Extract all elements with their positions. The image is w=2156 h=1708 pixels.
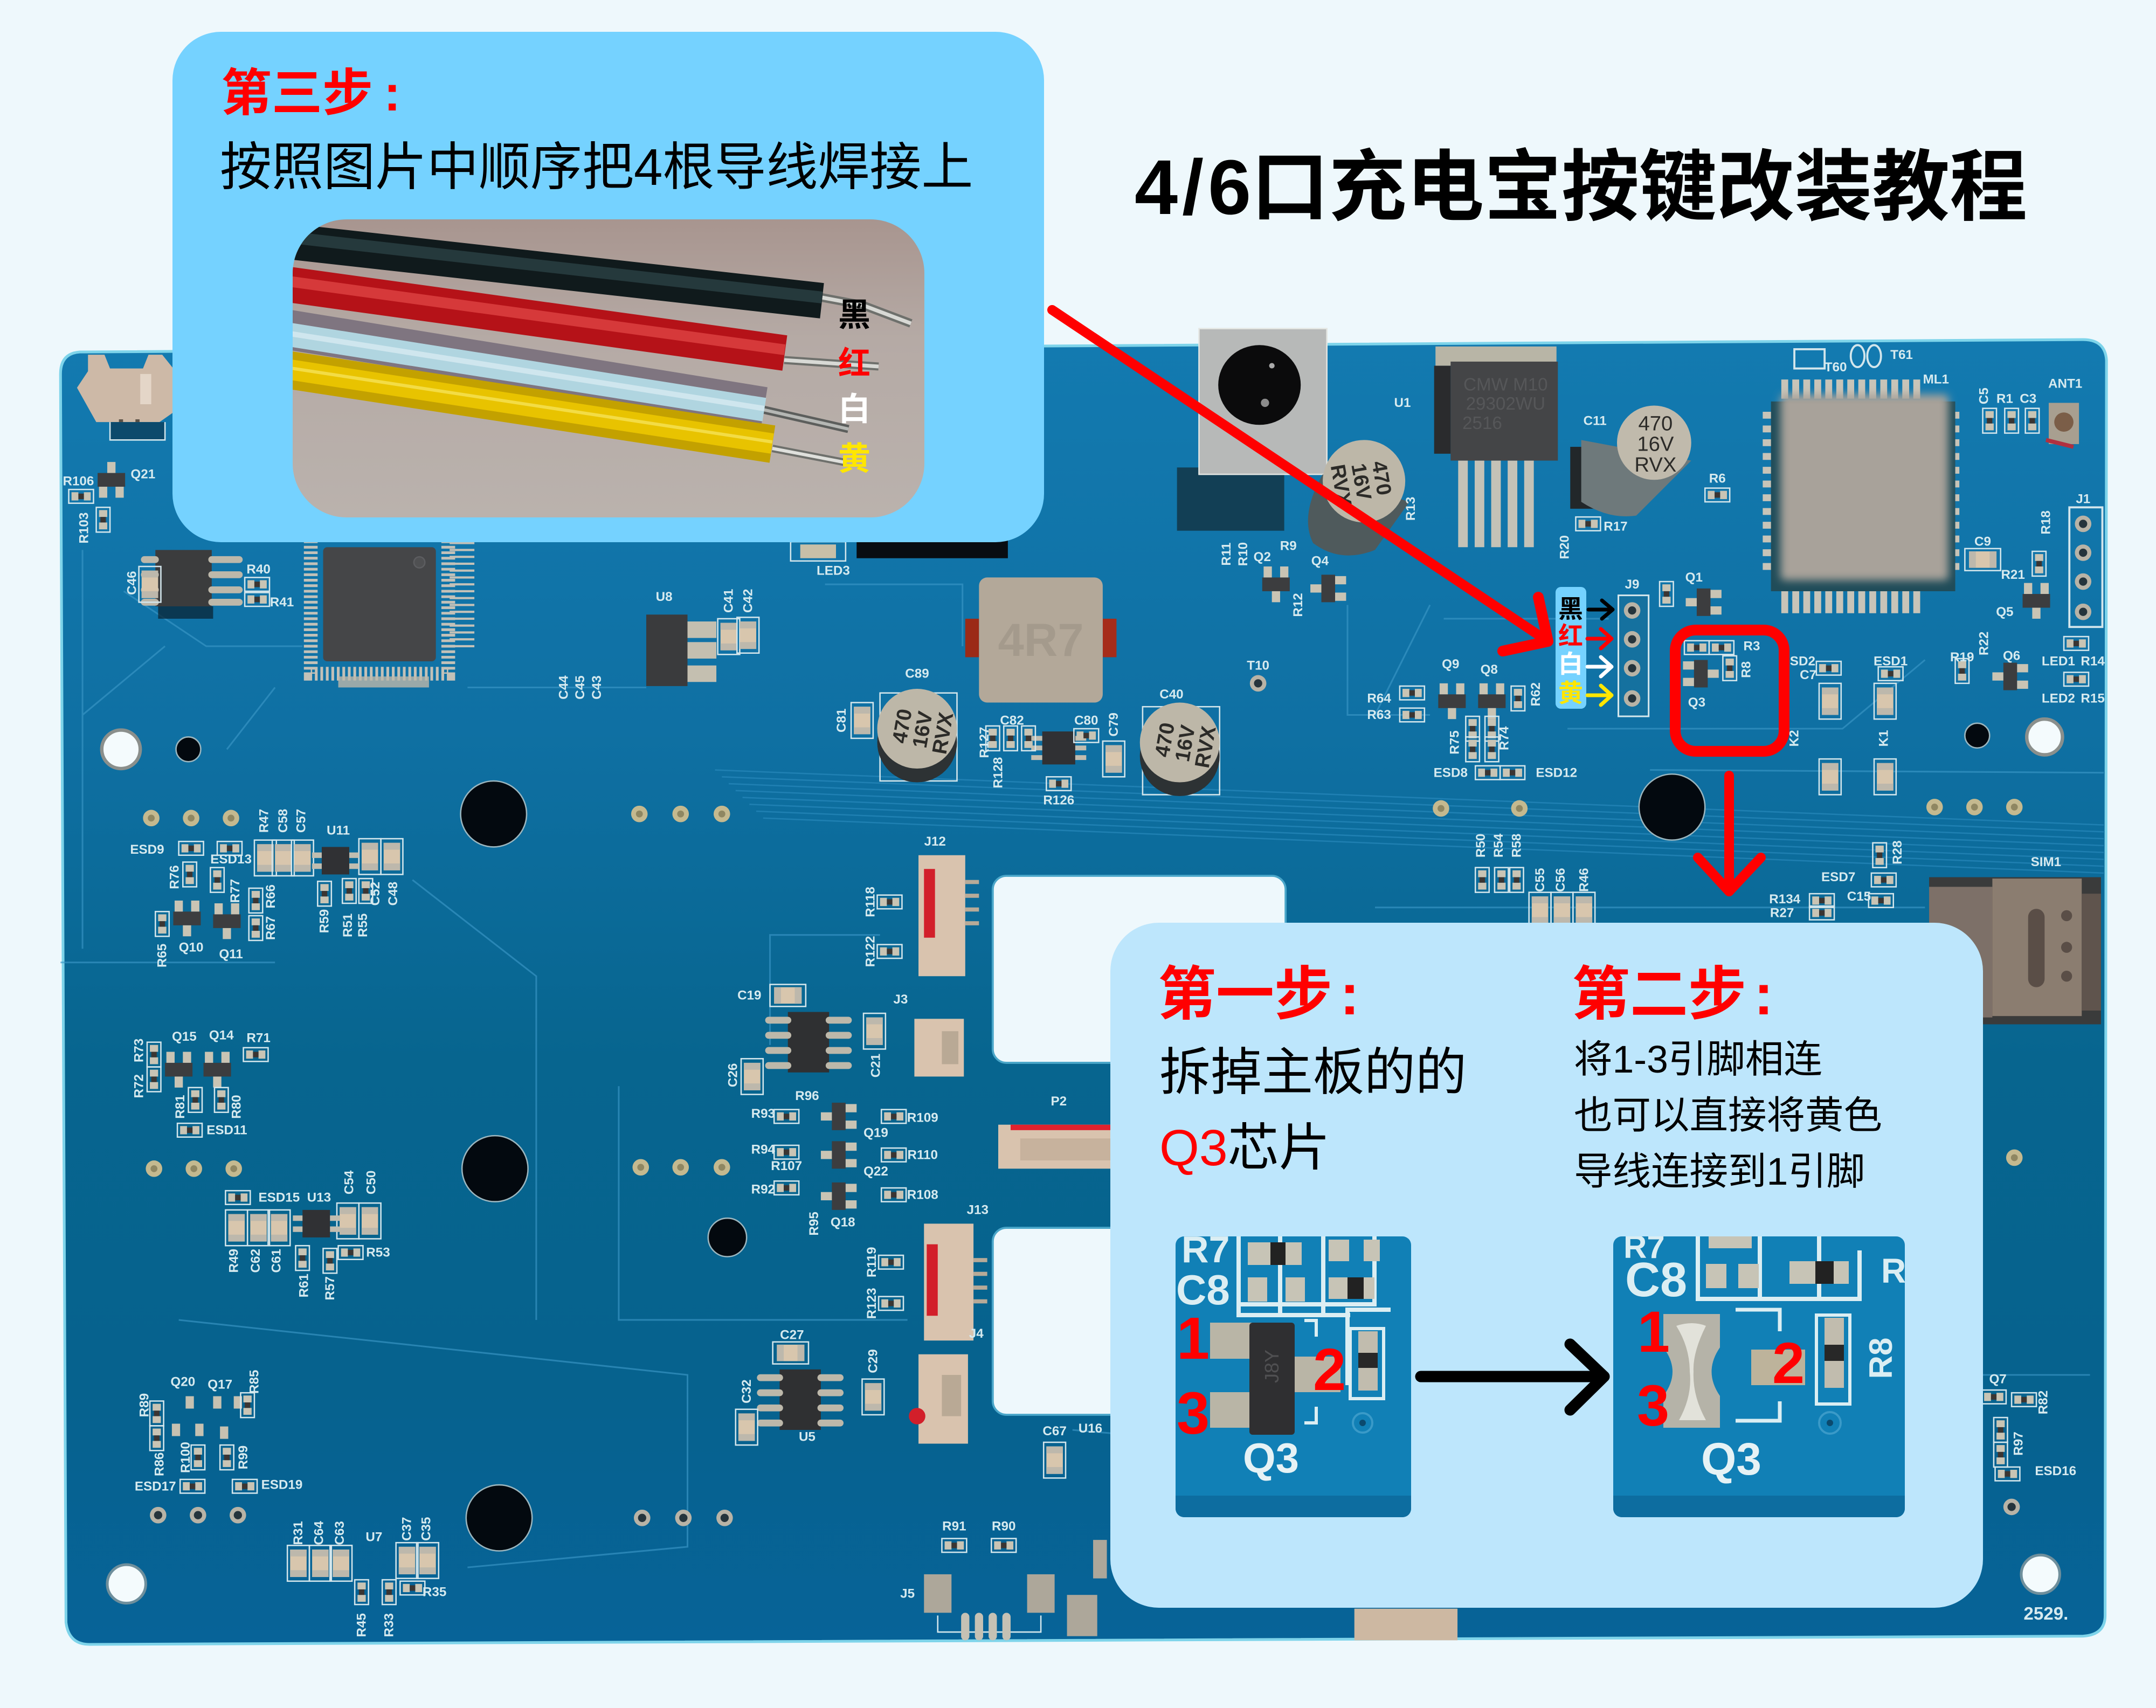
panel background (172, 32, 1044, 542)
silkscreen labels: K1 (1877, 730, 1891, 746)
silkscreen labels: C45 (573, 675, 588, 700)
silkscreen labels: R51 (341, 914, 355, 937)
silkscreen labels: C89 (905, 667, 929, 681)
silkscreen labels: R128 (991, 757, 1006, 789)
silkscreen labels: C52 (368, 882, 383, 905)
step 2 text: 将1-3引脚相连 (1574, 1038, 1822, 1081)
silkscreen labels: R85 (247, 1370, 262, 1394)
silkscreen labels: U13 (307, 1191, 331, 1205)
silkscreen labels: R64 (1367, 692, 1391, 706)
silkscreen labels: C35 (419, 1517, 433, 1541)
inductor (965, 577, 1116, 703)
inductor: 4R7 (998, 614, 1084, 666)
silkscreen labels: R35 (423, 1585, 446, 1600)
chip: U5 (761, 1370, 840, 1430)
capacitor: C11 tilted: 470 (1638, 412, 1673, 435)
silkscreen labels: R27 (1770, 906, 1794, 921)
black screw holes (176, 723, 1989, 1551)
silkscreen labels: R103 (77, 513, 91, 544)
silkscreen labels: C21 (869, 1054, 883, 1077)
silkscreen labels: R3 (1743, 639, 1760, 654)
panel: step 3 (172, 32, 1044, 542)
wire colour labels: 白 (838, 391, 870, 427)
silkscreen labels: R123 (865, 1288, 879, 1319)
silkscreen labels: R72 (132, 1074, 146, 1098)
step 2 text (1574, 1038, 1882, 1193)
capacitor: C4 tilted: 470 (1367, 459, 1396, 497)
silkscreen labels: R95 (807, 1212, 821, 1236)
silkscreen labels: P2 (1051, 1094, 1067, 1109)
silkscreen labels: C46 (125, 571, 140, 595)
silkscreen labels: Q5 (1996, 605, 2014, 619)
silkscreen labels: R66 (264, 884, 278, 908)
wireless module ML1 (1763, 379, 1959, 613)
silkscreen labels: R19 (1950, 650, 1974, 665)
silkscreen labels: R17 (1604, 520, 1628, 534)
photo: Q3 after bridging: R (1881, 1251, 1906, 1290)
silkscreen labels: C54 (342, 1170, 357, 1194)
silkscreen labels: C43 (590, 675, 604, 700)
silkscreen labels: C61 (269, 1249, 284, 1273)
silkscreen labels: U7 (365, 1530, 382, 1545)
silkscreen labels: R122 (863, 936, 877, 967)
mounting holes (102, 719, 2063, 1603)
components: left block (147, 839, 439, 1605)
silkscreen labels: R46 (1577, 868, 1591, 892)
silkscreen labels: C5 (1977, 388, 1992, 404)
silkscreen labels: Q17 (208, 1378, 232, 1392)
silkscreen labels: ESD1 (1874, 654, 1908, 669)
power regulator U1: 2516 (1462, 413, 1502, 433)
panel background (1110, 923, 1983, 1608)
silkscreen labels: Q14 (209, 1028, 234, 1043)
through-hole pads (143, 675, 2023, 1526)
silkscreen labels: ML1 (1923, 372, 1949, 387)
silkscreen labels: C50 (364, 1171, 378, 1194)
silkscreen labels: Q8 (1481, 662, 1498, 677)
silkscreen labels: R94 (751, 1142, 776, 1157)
step 2 text: 也可以直接将黄色 (1574, 1094, 1882, 1137)
wire colour labels (838, 297, 870, 477)
capacitor: C89 (877, 689, 958, 783)
silkscreen labels: Q9 (1442, 657, 1459, 672)
chip: large QFP (311, 535, 474, 688)
silkscreen labels: R67 (264, 916, 278, 940)
photo: Q3 after bridging: R7 (1623, 1229, 1665, 1265)
silkscreen labels: C58 (276, 809, 291, 833)
silkscreen labels: R12 (1291, 593, 1305, 617)
silkscreen labels: C42 (741, 589, 755, 613)
silkscreen labels: R126 (1043, 793, 1074, 807)
pin numbers: after: 2 (1772, 1330, 1805, 1395)
silkscreen labels: R10 (1236, 542, 1250, 566)
heading: step 3: 第三步: (221, 65, 400, 121)
silkscreen labels: ESD12 (1536, 765, 1577, 780)
silkscreen labels: Q10 (179, 940, 203, 955)
silkscreen labels: C9 (1974, 535, 1991, 549)
silkscreen labels: T61 (1890, 348, 1913, 362)
silkscreen labels: Q18 (831, 1215, 855, 1229)
silkscreen labels: C44 (557, 675, 571, 700)
wire: white (270, 327, 848, 429)
silkscreen labels: R99 (236, 1446, 251, 1469)
silkscreen labels: R93 (751, 1107, 775, 1121)
test pads T60 T61 (1794, 345, 1881, 369)
silkscreen labels: R18 (2039, 510, 2054, 535)
silkscreen labels: R106 (63, 474, 94, 489)
silkscreen labels (63, 348, 2105, 1637)
silkscreen labels: Q22 (863, 1164, 888, 1179)
silkscreen labels: C40 (1159, 687, 1184, 702)
silkscreen labels: LED1 (2042, 654, 2075, 669)
silkscreen labels: R63 (1367, 708, 1391, 722)
silkscreen labels: J4 (969, 1326, 984, 1341)
title: 4/6口充电宝按键改装教程 (1135, 144, 2027, 231)
silkscreen labels: C79 (1107, 713, 1121, 737)
silkscreen labels: R97 (2012, 1432, 2026, 1456)
silkscreen labels: Q1 (1685, 570, 1703, 585)
silkscreen labels: C26 (725, 1063, 740, 1087)
chip: U9 (139, 550, 270, 619)
photo: Q3 before removal: J8Y (1261, 1350, 1283, 1383)
silkscreen labels: R40 (246, 562, 271, 577)
silkscreen labels: ESD13 (210, 852, 252, 867)
silkscreen labels: T10 (1247, 658, 1269, 673)
capacitor: C11 tilted: 16V (1637, 433, 1674, 456)
photo: Q3 after bridging (1613, 1229, 1906, 1517)
silkscreen labels: C11 (1584, 413, 1607, 428)
SIM card slot (1929, 877, 2101, 1024)
silkscreen labels: R62 (1529, 682, 1543, 706)
silkscreen labels: R109 (907, 1111, 938, 1125)
silkscreen labels: R9 (1280, 538, 1297, 553)
wire: red (270, 279, 879, 367)
silkscreen labels: R89 (137, 1393, 152, 1417)
silkscreen labels: C55 (1533, 868, 1547, 892)
silkscreen labels: ESD8 (1434, 765, 1468, 780)
silkscreen labels: C3 (2020, 391, 2036, 406)
silkscreen labels: R8 (1739, 661, 1753, 678)
connectors J12 J3 P2 J13 J4 (909, 855, 1115, 1444)
silkscreen labels: R74 (1497, 726, 1511, 750)
silkscreen labels: R73 (132, 1039, 146, 1062)
key arrows (1587, 600, 1613, 705)
silkscreen labels: R21 (2001, 568, 2025, 582)
silkscreen labels: R55 (356, 914, 370, 937)
silkscreen labels: R90 (992, 1519, 1015, 1533)
step 1 text: Q3 chip: Q3芯片 (1159, 1119, 1330, 1177)
pin numbers: before (1178, 1318, 1344, 1434)
silkscreen labels: ANT1 (2048, 376, 2082, 391)
silkscreen labels: R134 (1769, 892, 1801, 907)
silkscreen labels: Q21 (130, 467, 155, 482)
silkscreen labels: R86 (153, 1453, 167, 1476)
silkscreen labels: R14 (2081, 654, 2105, 669)
key labels (1558, 595, 1583, 707)
silkscreen labels: U8 (656, 590, 673, 604)
silkscreen labels: C32 (740, 1379, 754, 1403)
photo: Q3 before removal (1176, 1228, 1411, 1517)
capacitor: C40 (1140, 703, 1221, 796)
photo: four wires (270, 219, 924, 517)
silkscreen labels: J13 (967, 1203, 989, 1218)
power regulator U1 (1434, 347, 1558, 547)
silkscreen labels: U16 (1079, 1421, 1102, 1436)
red box around Q3 (1675, 630, 1784, 751)
heading: step 2: 第二步: (1572, 962, 1773, 1027)
silkscreen labels: R11 (1219, 543, 1234, 566)
silkscreen labels: ESD11 (206, 1123, 247, 1138)
silkscreen labels: C67 (1042, 1424, 1067, 1439)
silkscreen labels: R54 (1491, 833, 1506, 858)
silkscreen labels: R20 (1558, 535, 1572, 559)
chip: U3 (769, 1012, 848, 1073)
key labels: 黄 (1558, 679, 1583, 707)
silkscreen labels: LED2 (2042, 692, 2075, 706)
silkscreen labels: R1 (1996, 391, 2013, 406)
silkscreen labels: R33 (382, 1613, 397, 1637)
silkscreen labels: R110 (907, 1147, 938, 1162)
silkscreen labels: Q11 (219, 947, 243, 962)
photo: Q3 after bridging: C8 (1625, 1253, 1687, 1307)
capacitor: C4 tilted (1308, 440, 1409, 556)
board outline (60, 340, 2106, 1644)
wire colour key (1556, 587, 1613, 709)
silkscreen labels: C64 (312, 1521, 326, 1545)
antenna connector (1983, 403, 2079, 447)
silkscreen labels: LED3 (817, 563, 850, 578)
silkscreen labels: C37 (400, 1517, 414, 1541)
silkscreen labels: C7 (1800, 668, 1816, 682)
step 2 text: 导线连接到1引脚 (1574, 1150, 1865, 1193)
wire: yellow (270, 365, 845, 462)
silkscreen labels: R15 (2081, 692, 2105, 706)
silkscreen labels: R53 (366, 1246, 390, 1260)
wire colour labels: 黄 (838, 441, 870, 477)
silkscreen labels: R77 (228, 879, 243, 903)
silkscreen labels: R80 (229, 1095, 244, 1119)
capacitor: C11 tilted (1570, 406, 1691, 516)
silkscreen labels: R31 (291, 1521, 306, 1545)
silkscreen labels: U1 (1394, 396, 1411, 410)
silkscreen labels: R28 (1890, 840, 1905, 865)
pin numbers: after (1639, 1312, 1802, 1426)
silkscreen labels: R108 (907, 1187, 938, 1202)
silkscreen labels: U5 (799, 1429, 816, 1444)
silkscreen labels: Q3 (1688, 695, 1705, 710)
pin numbers: before: 2 (1313, 1337, 1346, 1403)
silkscreen labels: C41 (722, 589, 736, 613)
silkscreen labels: R82 (2036, 1391, 2050, 1414)
silkscreen labels: R58 (1509, 834, 1524, 858)
wire colour labels: 黑 (838, 297, 870, 333)
capacitor: C4 tilted: 16V (1346, 462, 1376, 502)
silkscreen labels: Q6 (2003, 648, 2020, 663)
connector J5 (924, 1540, 1107, 1636)
silkscreen labels: U11 (327, 823, 350, 838)
instruction text: 按照图片中顺序把4根导线焊接上 (220, 139, 973, 196)
silkscreen labels: Q7 (1989, 1372, 2007, 1386)
silkscreen labels: C63 (333, 1521, 347, 1545)
silkscreen labels: C57 (294, 809, 308, 833)
silkscreen labels: ESD16 (2035, 1464, 2076, 1478)
pin numbers: after: 3 (1637, 1373, 1669, 1438)
silkscreen labels: J12 (924, 834, 946, 849)
panel: steps 1 and 2 (1110, 923, 1983, 1608)
chip: Q21 (69, 462, 125, 532)
circuit board photo (60, 329, 2106, 1644)
silkscreen labels: C56 (1553, 868, 1568, 892)
silkscreen labels: J3 (893, 992, 908, 1007)
silkscreen labels: SD2 (1790, 654, 1815, 669)
key background (1556, 587, 1586, 709)
silkscreen labels: J9 (1625, 577, 1640, 592)
capacitor: C11 tilted: RVX (1634, 453, 1676, 476)
silkscreen labels: 2529. (2023, 1604, 2068, 1624)
silkscreen labels: ESD9 (130, 842, 164, 857)
silkscreen labels: R75 (1448, 730, 1462, 755)
key labels: 黑 (1558, 595, 1583, 623)
silkscreen labels: Q4 (1311, 554, 1329, 568)
long red arrow to J9 (1052, 310, 1548, 651)
header J1 (2069, 507, 2102, 627)
silkscreen labels: R127 (977, 727, 992, 758)
connector: bottom edge (1355, 1609, 1457, 1640)
silkscreen labels: R81 (173, 1095, 188, 1119)
capacitor: C4 tilted: RVX (1326, 462, 1356, 508)
header J9 (1619, 596, 1649, 716)
silkscreen labels: R41 (270, 595, 294, 610)
heading: step 1: 第一步: (1158, 962, 1359, 1027)
silkscreen labels: R76 (168, 865, 182, 889)
silkscreen labels: J1 (2076, 492, 2090, 507)
silkscreen labels: R96 (795, 1089, 819, 1103)
silkscreen labels: R57 (323, 1276, 337, 1301)
silkscreen labels: R119 (865, 1247, 879, 1277)
silkscreen labels: R107 (771, 1159, 802, 1173)
silkscreen labels: C82 (1000, 713, 1024, 728)
connector: top-left (77, 355, 173, 440)
silkscreen labels: C81 (834, 709, 849, 732)
silkscreen labels: C80 (1074, 713, 1098, 728)
wire: black (270, 235, 911, 323)
silkscreen labels: R47 (257, 809, 271, 833)
silkscreen labels: R92 (751, 1182, 775, 1197)
regulator U8 (646, 614, 873, 738)
photo: Q3 after bridging: R8 (1863, 1338, 1899, 1379)
silkscreen labels: ESD7 (1821, 870, 1855, 884)
transistors: middle (736, 895, 1066, 1552)
silkscreen labels: ESD17 (135, 1479, 176, 1493)
silkscreen labels: K2 (1787, 730, 1802, 746)
silkscreen labels: R65 (155, 944, 170, 967)
silkscreen labels: Q15 (172, 1029, 197, 1044)
key labels: 红 (1558, 622, 1583, 650)
silkscreen labels: C29 (866, 1349, 881, 1373)
silkscreen labels: T60 (1825, 360, 1847, 375)
power regulator U1: 29302WU (1466, 394, 1545, 414)
silkscreen labels: ESD15 (258, 1191, 300, 1205)
silkscreen labels: SIM1 (2031, 855, 2061, 869)
silkscreen labels: R91 (942, 1519, 966, 1533)
silkscreen labels: Q19 (863, 1126, 888, 1140)
silkscreen labels: J5 (900, 1586, 915, 1601)
chip: U18 (986, 726, 1125, 791)
red arrow down to panel (1698, 776, 1761, 891)
silkscreen labels: Q2 (1254, 550, 1271, 564)
silkscreen labels: R59 (317, 909, 332, 933)
pin numbers: before: 1 (1177, 1305, 1210, 1372)
silkscreen labels: Q20 (170, 1374, 195, 1389)
DC jack (1177, 329, 1327, 531)
silkscreen labels: R22 (1977, 632, 1992, 655)
silkscreen labels: R61 (296, 1274, 311, 1297)
board cutout windows (993, 876, 1286, 1415)
key labels: 白 (1558, 650, 1583, 678)
silkscreen labels: C27 (780, 1328, 804, 1343)
silkscreen labels: C48 (386, 882, 400, 905)
pin numbers: after: 1 (1637, 1299, 1670, 1364)
silkscreen labels: C19 (737, 988, 762, 1003)
silkscreen labels: R50 (1474, 834, 1488, 858)
photo: Q3 before removal: Q3 (1243, 1434, 1299, 1482)
silkscreen labels: R45 (355, 1613, 369, 1637)
pin numbers: before: 3 (1177, 1380, 1210, 1447)
step 1 text: 拆掉主板的的 (1159, 1044, 1467, 1101)
silkscreen labels: R100 (178, 1442, 193, 1473)
silkscreen labels: ESD19 (261, 1478, 302, 1492)
silkscreen labels: R49 (226, 1249, 241, 1273)
transistors: right side (1262, 488, 2089, 1481)
photo: Q3 after bridging: Q3 (1701, 1434, 1761, 1484)
LED3 and dark component under panel (791, 534, 1008, 561)
wire colour labels: 红 (838, 345, 870, 382)
silkscreen labels: R71 (246, 1031, 271, 1046)
power regulator U1: CMW M10 (1463, 375, 1548, 395)
silkscreen labels: R13 (1404, 497, 1418, 521)
silkscreen labels: R118 (863, 887, 877, 917)
photo: Q3 before removal: C8 (1176, 1266, 1230, 1313)
silkscreen labels: C15 (1847, 889, 1871, 904)
photo: Q3 before removal: R7 (1181, 1228, 1229, 1270)
silkscreen labels: R6 (1709, 471, 1726, 486)
arrow: before to after (1421, 1344, 1604, 1410)
silkscreen labels: C62 (248, 1249, 263, 1273)
